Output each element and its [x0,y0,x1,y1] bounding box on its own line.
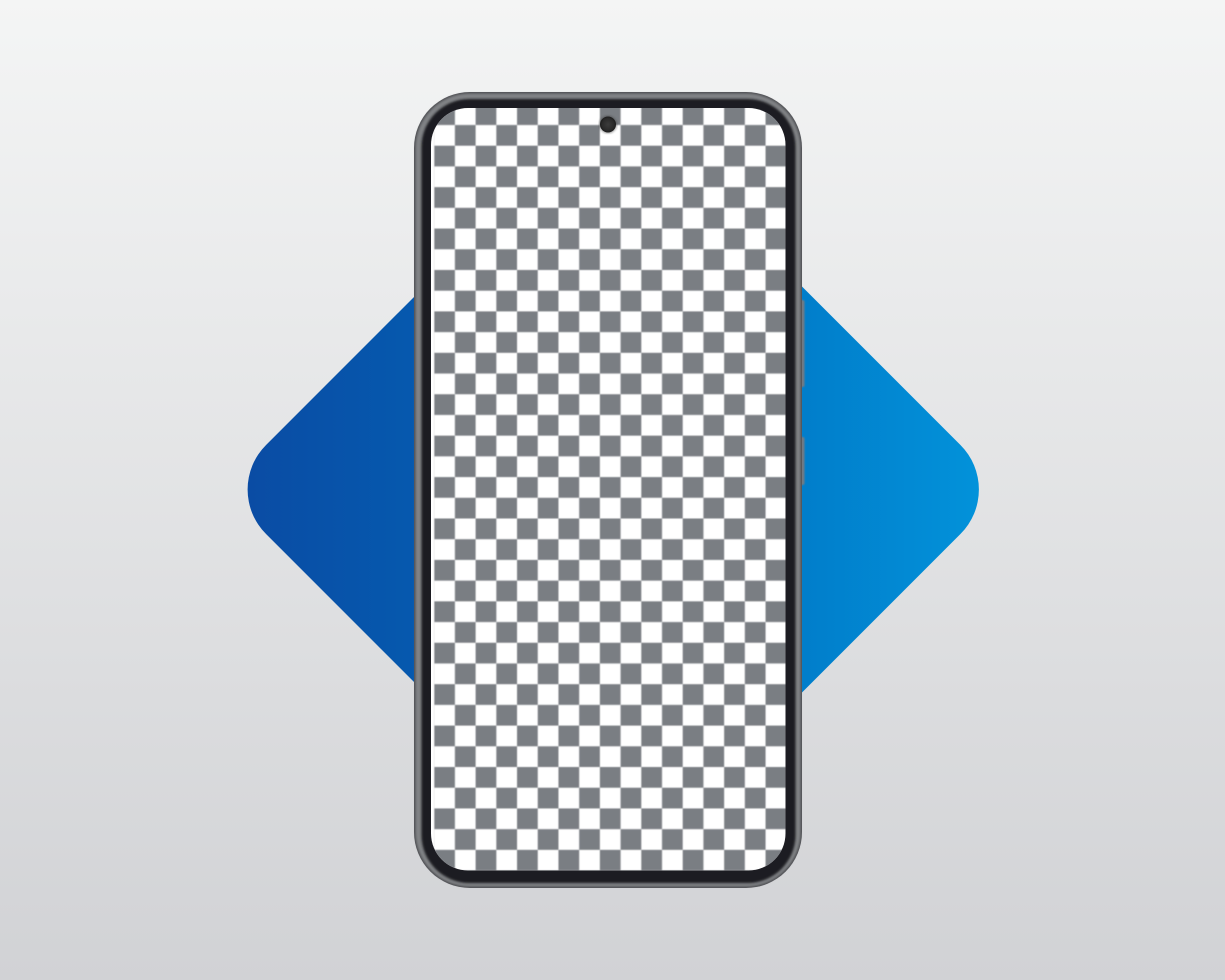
phone [414,92,804,888]
screen checkerboard [431,104,786,871]
front camera [599,116,617,134]
blue rounded diamond [222,98,1005,881]
side buttons [799,300,804,485]
phone frame [414,92,802,888]
